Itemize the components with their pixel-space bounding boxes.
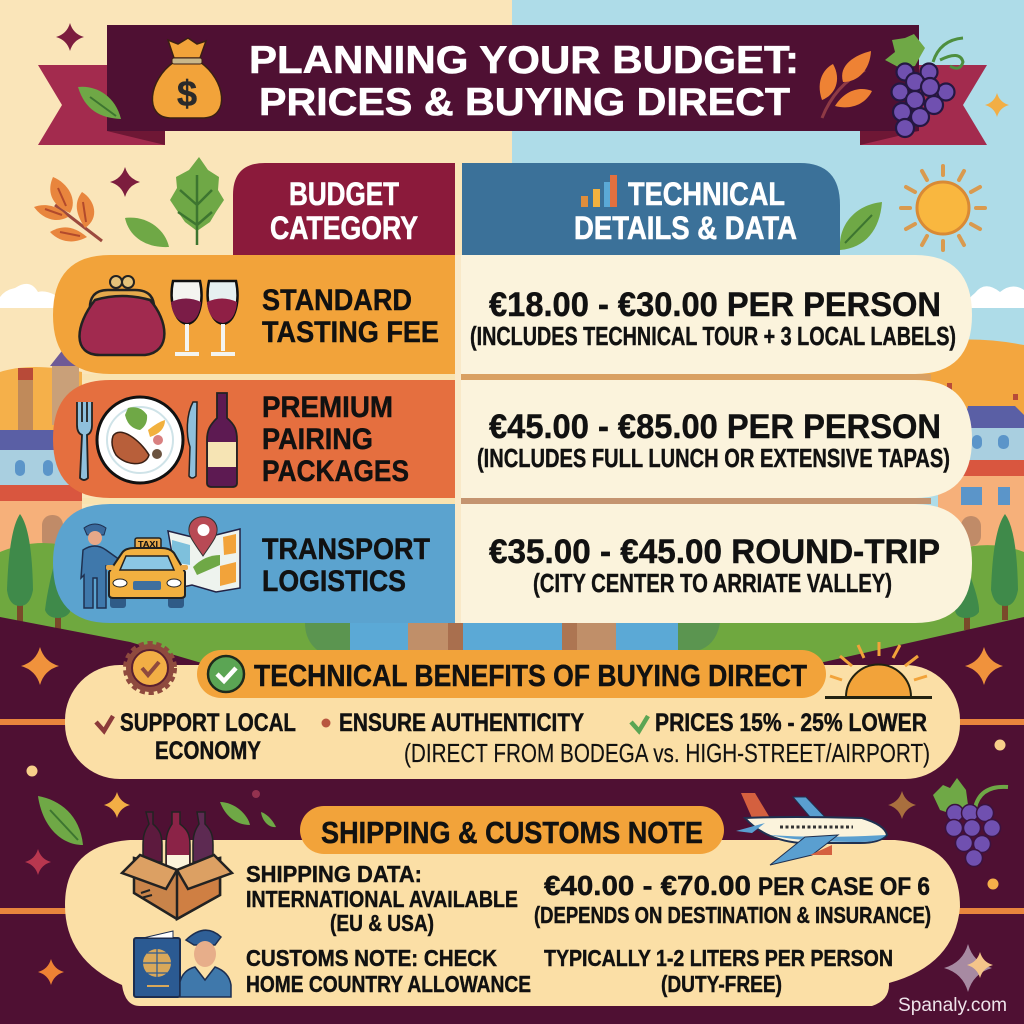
row 1: standard tasting fee (53, 255, 455, 374)
benefit: ensure authenticity: ENSURE AUTHENTICITY (339, 709, 584, 737)
shipping price: (DEPENDS ON DESTINATION & INSURANCE) (534, 902, 931, 928)
icon: autumn branch (34, 177, 102, 241)
header: technical details: TECHNICAL (628, 176, 785, 212)
watermark star (944, 944, 993, 992)
row label: TRANSPORT (262, 533, 430, 566)
header: budget category: BUDGET (289, 176, 399, 212)
header: budget category: CATEGORY (270, 210, 418, 246)
customs note (246, 945, 531, 997)
icon: grapes lower right (933, 778, 1008, 866)
icon: passport (134, 931, 180, 997)
benefit: prices lower: PRICES 15% - 25% LOWER (655, 709, 927, 737)
maroon lower background (0, 617, 1024, 1024)
icon: money bag: $ (177, 73, 197, 114)
heading pill: TECHNICAL BENEFITS OF BUYING DIRECT (254, 658, 807, 693)
icon: box of wine (122, 812, 232, 919)
left ribbon (38, 65, 165, 145)
customs allowance: TYPICALLY 1-2 LITERS PER PERSON (544, 945, 893, 971)
trees (7, 514, 1018, 630)
row label: TASTING FEE (262, 316, 439, 349)
benefit: support local economy (96, 709, 296, 765)
icon: customs officer (180, 930, 231, 997)
icon: plate with steak (97, 397, 183, 483)
row 2 details (461, 380, 972, 498)
row 3 details (461, 504, 972, 623)
icon: taxi (106, 538, 188, 608)
shipping data: SHIPPING DATA: (246, 861, 422, 887)
icon: driver (81, 524, 120, 608)
shipping price (534, 870, 931, 928)
icon: taxi: TAXI (138, 540, 158, 549)
row 1 details: €18.00 - €30.00 PER PERSON (489, 286, 941, 324)
side accents lower (0, 647, 1024, 985)
icon: check circle (208, 656, 244, 692)
icon: leaf right of header (840, 202, 882, 250)
shipping price: PER CASE OF 6 (758, 873, 930, 901)
icon: green leaf on ribbon (78, 87, 121, 119)
table gutters (82, 255, 931, 623)
decorative stars top (56, 23, 1009, 197)
customs allowance (544, 945, 893, 997)
shipping data: (EU & USA) (330, 910, 434, 936)
panel: shipping and customs (65, 793, 960, 1006)
icon: sunset (825, 642, 932, 699)
icon: knife (187, 402, 197, 478)
header: technical details: DETAILS & DATA (574, 210, 797, 246)
icon: airplane (736, 793, 887, 865)
heading pill (197, 650, 826, 698)
title text: PLANNING YOUR BUDGET: (249, 39, 799, 82)
row label (262, 284, 439, 349)
benefit: prices lower (404, 709, 930, 768)
row label: PAIRING (262, 423, 373, 456)
icon: green leaves (125, 157, 224, 247)
icon: grapes top (885, 34, 963, 137)
shipping data (246, 861, 518, 936)
benefit: support local economy: ECONOMY (155, 737, 261, 765)
row 1 details (461, 255, 972, 374)
benefit: support local economy: SUPPORT LOCAL (120, 709, 296, 737)
panel: technical benefits (65, 642, 960, 779)
title text: PRICES & BUYING DIRECT (259, 81, 790, 124)
icon: autumn leaves in banner (820, 51, 872, 118)
row 3: transport logistics (53, 504, 455, 623)
icon: sun (901, 166, 985, 250)
row 2 details: €45.00 - €85.00 PER PERSON (489, 408, 941, 446)
customs allowance: (DUTY-FREE) (661, 971, 782, 997)
shipping data: INTERNATIONAL AVAILABLE (246, 886, 518, 912)
row label: LOGISTICS (262, 565, 406, 598)
watermark text: Spanaly.com (898, 995, 1007, 1016)
row 2: premium pairing packages (53, 380, 455, 498)
title text (249, 39, 799, 124)
heading pill: SHIPPING & CUSTOMS NOTE (321, 815, 703, 850)
title banner (38, 25, 987, 145)
heading pill (300, 806, 724, 854)
row label (262, 533, 430, 598)
row label: STANDARD (262, 284, 412, 317)
row label (262, 391, 409, 488)
icon: money bag (152, 38, 222, 118)
customs note: CUSTOMS NOTE: CHECK (246, 945, 497, 971)
banner body (107, 25, 919, 131)
icon: purse (79, 276, 164, 355)
icon: bar chart (581, 175, 617, 207)
icon: rosette badge (126, 644, 174, 692)
icon: map with pin (168, 517, 240, 592)
icon: wine glasses (171, 281, 237, 354)
row label: PREMIUM (262, 391, 393, 424)
row 3 details: (CITY CENTER TO ARRIATE VALLEY) (533, 568, 892, 598)
header: budget category (233, 163, 455, 255)
right ribbon (860, 65, 987, 145)
background scene (0, 0, 1024, 675)
shipping price: €40.00 - €70.00 (544, 870, 751, 901)
row label: PACKAGES (262, 455, 409, 488)
row 3 details: €35.00 - €45.00 ROUND-TRIP (489, 533, 940, 571)
icon: fork (77, 402, 92, 480)
customs note: HOME COUNTRY ALLOWANCE (246, 971, 531, 997)
header: technical details (462, 163, 840, 255)
icon: wine bottle (207, 393, 237, 487)
